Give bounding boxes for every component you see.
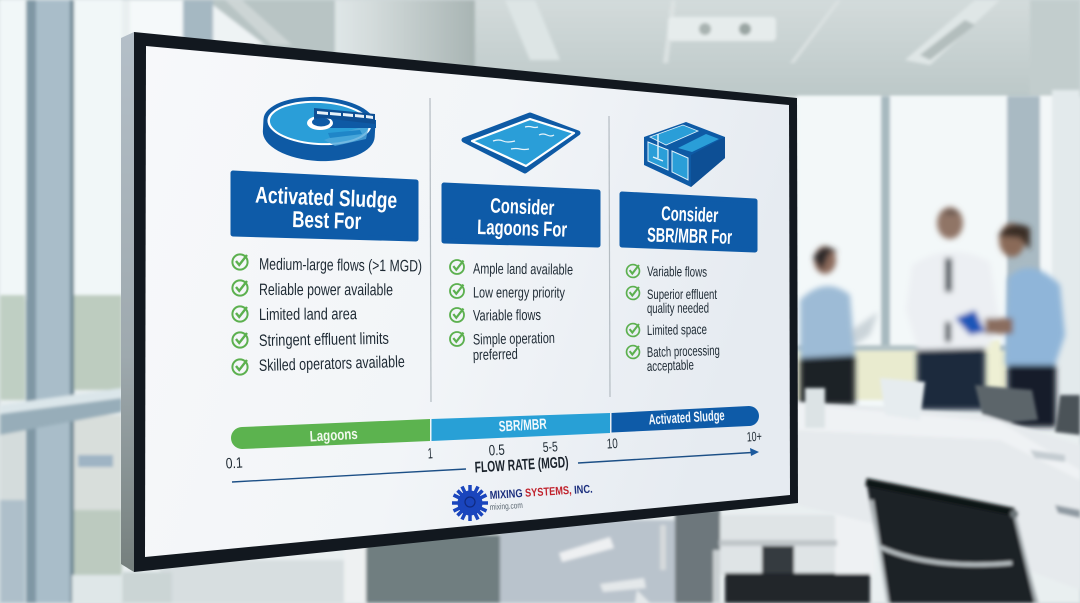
list: lagoon criteria: Low energy priority <box>473 285 565 302</box>
segment: activated sludge <box>612 406 759 432</box>
heading: activated sludge best for: Best For <box>292 206 362 234</box>
list: lagoon criteria: Simple operation <box>473 330 555 348</box>
list: activated sludge criteria: Medium-large flows (>1 MGD) <box>259 256 422 275</box>
monitor side edge <box>121 32 134 572</box>
company name: MIXING SYSTEMS, INC. <box>489 484 593 502</box>
screen panel <box>145 46 790 557</box>
axis arrow <box>232 448 759 482</box>
heading: consider sbr/mbr for: SBR/MBR For <box>647 225 733 249</box>
axis tick labels: 0.1 <box>225 455 243 472</box>
foreground chair <box>866 480 1038 603</box>
conference table and chairs <box>797 378 1080 590</box>
list: activated sludge criteria <box>232 254 422 375</box>
monitor bezel <box>134 32 798 572</box>
flow rate bar chart <box>225 406 762 482</box>
segment: lagoons <box>231 419 430 449</box>
list: activated sludge criteria: Skilled operators available <box>259 353 405 375</box>
axis tick labels: 10+ <box>746 429 762 444</box>
panel: activated sludge <box>232 94 422 375</box>
axis tick labels <box>225 429 762 472</box>
heading: consider lagoons for <box>444 185 598 245</box>
icon: lagoon basin <box>464 115 578 171</box>
logo: mixing systems <box>452 484 593 521</box>
lower centre: column base and floor <box>122 510 875 603</box>
list: sbr/mbr criteria <box>627 263 720 374</box>
list: lagoon criteria: Variable flows <box>473 307 541 324</box>
heading: activated sludge best for: Activated Sludge <box>255 182 398 213</box>
list: sbr/mbr criteria: Superior effluent <box>647 286 717 302</box>
monitor <box>121 32 798 572</box>
list: sbr/mbr criteria: acceptable <box>647 356 694 374</box>
heading: consider sbr/mbr for <box>622 194 755 250</box>
axis tick labels: 5-5 <box>542 438 558 455</box>
segment: lagoons: Lagoons <box>309 426 358 445</box>
list: lagoon criteria <box>450 260 573 364</box>
icon: blue gear <box>452 485 488 521</box>
heading: consider sbr/mbr for: Consider <box>661 203 719 227</box>
axis tick labels: 1 <box>427 445 433 462</box>
icon: sbr tank <box>644 122 725 187</box>
heading: activated sludge best for <box>233 173 416 239</box>
heading: consider lagoons for: Lagoons For <box>477 216 567 242</box>
list: lagoon criteria: Ample land available <box>473 261 573 279</box>
list: activated sludge criteria: Reliable power available <box>259 281 393 299</box>
left windows and mullions <box>0 0 122 603</box>
segment: sbr/mbr <box>432 413 610 441</box>
panel: sbr/mbr <box>622 122 755 374</box>
list: sbr/mbr criteria: Batch processing <box>647 342 720 360</box>
panel: lagoons <box>444 115 598 364</box>
axis tick labels: 0.5 <box>488 442 505 459</box>
icon: circular clarifier <box>261 94 377 164</box>
segment: activated sludge: Activated Sludge <box>648 408 725 428</box>
list: sbr/mbr criteria: Variable flows <box>647 263 707 280</box>
list: lagoon criteria: preferred <box>473 346 518 364</box>
heading: consider lagoons for: Consider <box>490 195 555 220</box>
list: sbr/mbr criteria: Limited space <box>647 321 707 338</box>
list: activated sludge criteria: Limited land area <box>259 305 358 324</box>
axis tick labels: 10 <box>606 435 618 451</box>
company url: mixing.com <box>489 500 523 512</box>
people <box>800 207 1065 427</box>
list: activated sludge criteria: Stringent effluent limits <box>259 330 389 350</box>
right windows, column and wall <box>797 90 1080 410</box>
list: sbr/mbr criteria: quality needed <box>647 300 709 316</box>
column divider lines <box>430 98 610 402</box>
axis title: FLOW RATE (MGD) <box>474 454 569 476</box>
segment: sbr/mbr: SBR/MBR <box>498 416 547 435</box>
